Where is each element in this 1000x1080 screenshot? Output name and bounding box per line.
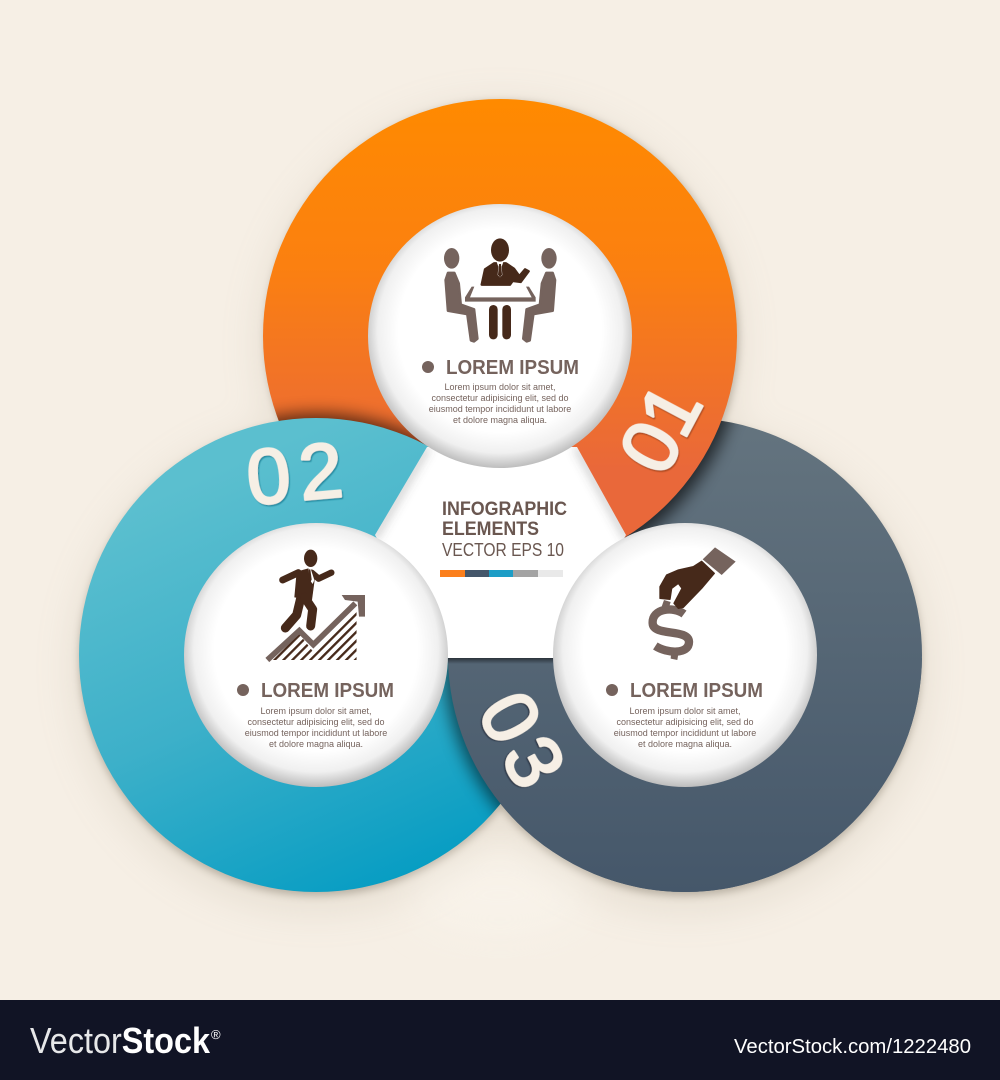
body text: gray circle (614, 706, 756, 749)
body text: orange circle: et dolore magna aliqua. (453, 415, 547, 425)
heading: blue circle: LOREM IPSUM (261, 680, 394, 702)
footer logo: ® (211, 1027, 221, 1042)
central white panel (373, 447, 628, 658)
gray band shadow (440, 658, 565, 664)
blue shadow on orange (274, 401, 426, 445)
soft ground shadow (74, 105, 927, 910)
ring: 03 gray (448, 418, 922, 892)
heading: orange circle: LOREM IPSUM (446, 357, 579, 379)
ring: 01 orange (263, 99, 737, 573)
gray shadow on blue (438, 659, 500, 816)
number 01: 01 (601, 370, 719, 487)
ring: 02 blue (79, 418, 553, 892)
body text: orange circle: eiusmod tempor incididunt ut labore (429, 404, 571, 414)
center title: ELEMENTS (442, 519, 539, 540)
gray ring lower part over blue (448, 658, 922, 892)
body text: gray circle: et dolore magna aliqua. (638, 739, 732, 749)
color bar (440, 570, 563, 577)
hole: blue circle (184, 523, 448, 787)
body text: gray circle: consectetur adipisicing elit, sed do (616, 717, 754, 727)
center title: INFOGRAPHIC (442, 499, 567, 520)
number 02: 02 (243, 425, 355, 521)
body text: orange circle: consectetur adipisicing elit, sed do (431, 393, 569, 403)
icon: meeting (444, 238, 557, 341)
tight edge shadow (79, 101, 922, 896)
ground glow (410, 855, 590, 935)
orange shadow on gray (624, 420, 738, 538)
icon: hand holding dollar (653, 547, 736, 660)
number 03: 03 (462, 677, 587, 808)
icon: runner on rising arrow (265, 550, 365, 661)
hole: gray circle (553, 523, 817, 787)
hole: orange circle (368, 204, 632, 468)
center title (442, 499, 567, 560)
body text: gray circle: eiusmod tempor incididunt ut labore (614, 728, 756, 738)
body text: gray circle: Lorem ipsum dolor sit amet, (629, 706, 741, 716)
footer logo: VectorStock (30, 1020, 211, 1061)
body text: orange circle (429, 382, 571, 425)
body text: blue circle: consectetur adipisicing elit, sed do (247, 717, 385, 727)
footer url: VectorStock.com/1222480 (734, 1036, 971, 1058)
body text: orange circle: Lorem ipsum dolor sit amet, (444, 382, 556, 392)
body text: blue circle: eiusmod tempor incididunt ut labore (245, 728, 387, 738)
footer bar (0, 1000, 1000, 1080)
body text: blue circle: Lorem ipsum dolor sit amet, (260, 706, 372, 716)
body text: blue circle (245, 706, 387, 749)
center title: VECTOR EPS 10 (442, 540, 564, 560)
body text: blue circle: et dolore magna aliqua. (269, 739, 363, 749)
heading: gray circle: LOREM IPSUM (630, 680, 763, 702)
